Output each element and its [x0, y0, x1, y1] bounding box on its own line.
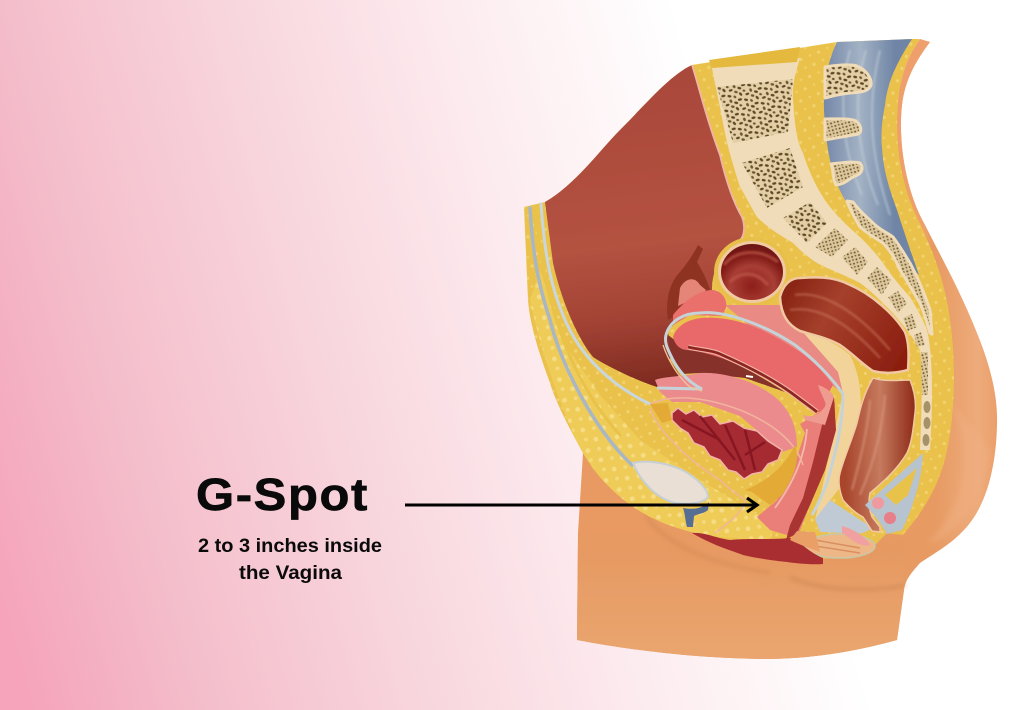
caption: location note: 2 to 3 inches inside [198, 535, 382, 557]
vertebral muscle, blue [824, 39, 919, 275]
rectum lower [839, 378, 915, 532]
peritoneum around uterus [657, 313, 843, 515]
front abdominal wall layers [530, 204, 650, 465]
anatomical illustration: female pelvis cross-section [524, 39, 997, 659]
pubic symphysis [633, 462, 708, 504]
pale tissue behind uterus [785, 310, 861, 520]
uterus [673, 318, 833, 412]
uterine cavity slit [688, 347, 817, 412]
spinous processes [825, 65, 932, 334]
yellow fatty tissue layer [524, 39, 954, 560]
sacrum top yellow cap [709, 47, 800, 68]
caption: location note: the Vagina [239, 562, 342, 584]
lower front fat pad [530, 270, 775, 540]
fallopian tube and ovary [667, 245, 722, 320]
rear skin strip [897, 39, 932, 245]
pointer arrow to G-spot [405, 498, 757, 512]
rectum upper [780, 277, 909, 373]
sacrum and lumbar spine [712, 58, 932, 450]
anal sphincter [865, 453, 923, 534]
heading: G-Spot: G-Spot [196, 469, 369, 520]
perineal skin wedge [790, 531, 820, 552]
clitoris [683, 502, 709, 527]
dark wedge under uterus [668, 335, 785, 392]
caption: location note [198, 535, 382, 584]
peritoneum edge [692, 65, 744, 240]
sigmoid colon [714, 237, 790, 307]
abdominal cavity [545, 65, 744, 388]
vagina walls [757, 397, 836, 540]
cervix [803, 385, 834, 425]
vulva, external tissue [692, 533, 823, 564]
upper uterine tissue [673, 290, 726, 325]
vertebra bodies [717, 79, 930, 446]
anterior pink tissue lines [650, 398, 803, 533]
pink mesentery [725, 305, 843, 393]
perineal muscle [805, 500, 875, 558]
amber tissue patches [650, 403, 797, 505]
urinary bladder [655, 373, 797, 479]
body skin silhouette [577, 40, 997, 659]
